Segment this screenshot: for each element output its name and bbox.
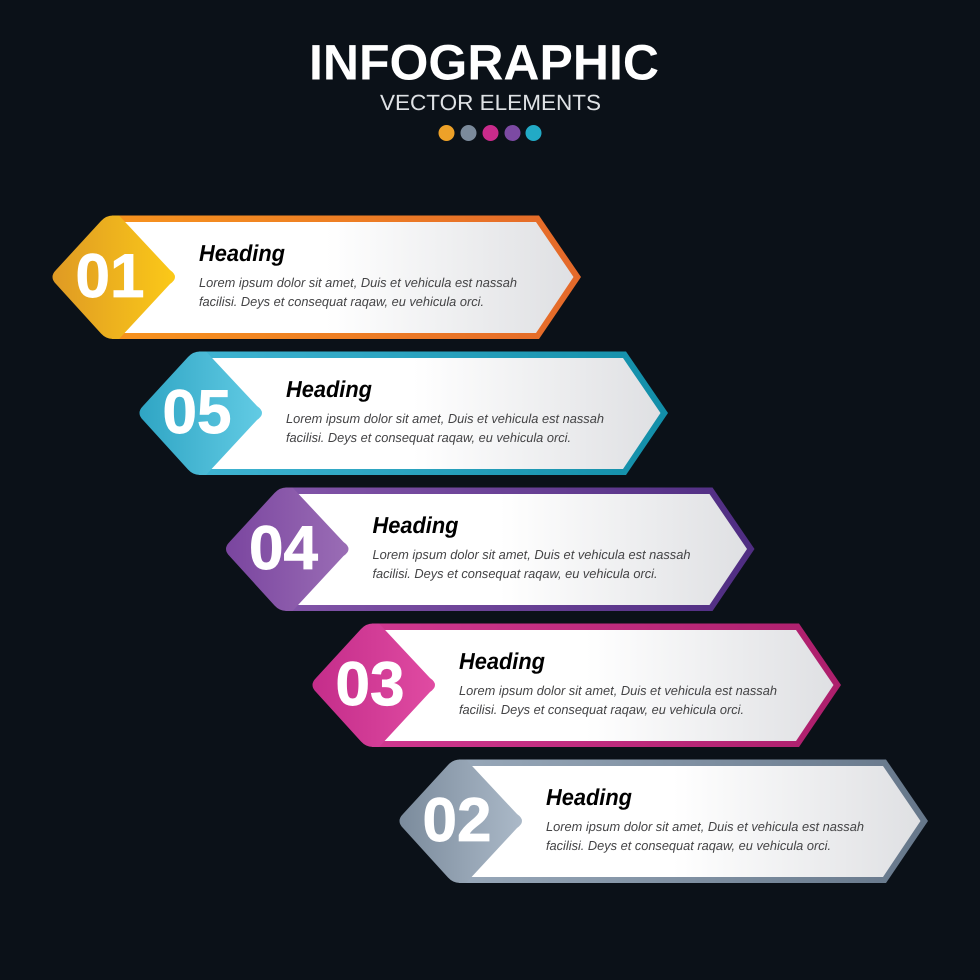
panel fill 01 (124, 222, 574, 333)
number 02: 02 (422, 786, 491, 855)
panel: step 03 (312, 624, 841, 747)
panel outline 05 (199, 352, 668, 475)
number 01: 01 (76, 242, 144, 311)
body text 02: Lorem ipsum dolor sit amet, Duis et vehicula est nassah (546, 819, 864, 834)
panel: step 02 (400, 760, 928, 883)
body text 01 (199, 275, 517, 309)
body text 01: facilisi. Deys et consequat raqaw, eu vehicula orci. (199, 294, 484, 309)
panel outline 03 (372, 624, 841, 747)
heading 05: Heading (286, 376, 372, 402)
panel fill 04 (298, 494, 747, 605)
body text 04: Lorem ipsum dolor sit amet, Duis et vehicula est nassah (372, 547, 690, 562)
body text 02: facilisi. Deys et consequat raqaw, eu vehicula orci. (546, 838, 831, 853)
panel: step 05 (140, 352, 668, 475)
subtitle: VECTOR ELEMENTS (380, 90, 601, 115)
heading 04: Heading (372, 512, 458, 538)
panel outline 02 (459, 760, 928, 883)
body text 05: Lorem ipsum dolor sit amet, Duis et vehicula est nassah (286, 411, 604, 426)
number badge 05 (140, 352, 262, 475)
body text 03 (459, 683, 777, 717)
panel fill 05 (211, 358, 660, 469)
body text 03: Lorem ipsum dolor sit amet, Duis et vehicula est nassah (459, 683, 777, 698)
heading 03: Heading (459, 648, 545, 674)
body text 04 (372, 547, 690, 581)
body text 02 (546, 819, 864, 853)
number 05: 05 (162, 378, 231, 447)
panel: step 04 (226, 488, 754, 611)
panel: step 01 (52, 216, 581, 339)
number badge 01 (52, 216, 175, 339)
number badge 04 (226, 488, 348, 611)
legend dots (438, 125, 542, 141)
number badge 03 (312, 624, 435, 747)
heading 02: Heading (546, 784, 632, 810)
title: INFOGRAPHIC (309, 34, 659, 90)
panel outline 01 (112, 216, 581, 339)
body text 01: Lorem ipsum dolor sit amet, Duis et vehicula est nassah (199, 275, 517, 290)
panel outline 04 (286, 488, 754, 611)
body text 05 (286, 411, 604, 445)
number 04: 04 (249, 514, 318, 583)
panel fill 02 (471, 766, 920, 877)
heading 01: Heading (199, 240, 285, 266)
number 03: 03 (336, 650, 404, 719)
body text 03: facilisi. Deys et consequat raqaw, eu vehicula orci. (459, 702, 744, 717)
body text 05: facilisi. Deys et consequat raqaw, eu vehicula orci. (286, 430, 571, 445)
panel fill 03 (384, 630, 834, 741)
body text 04: facilisi. Deys et consequat raqaw, eu vehicula orci. (372, 566, 658, 581)
number badge 02 (400, 760, 522, 883)
